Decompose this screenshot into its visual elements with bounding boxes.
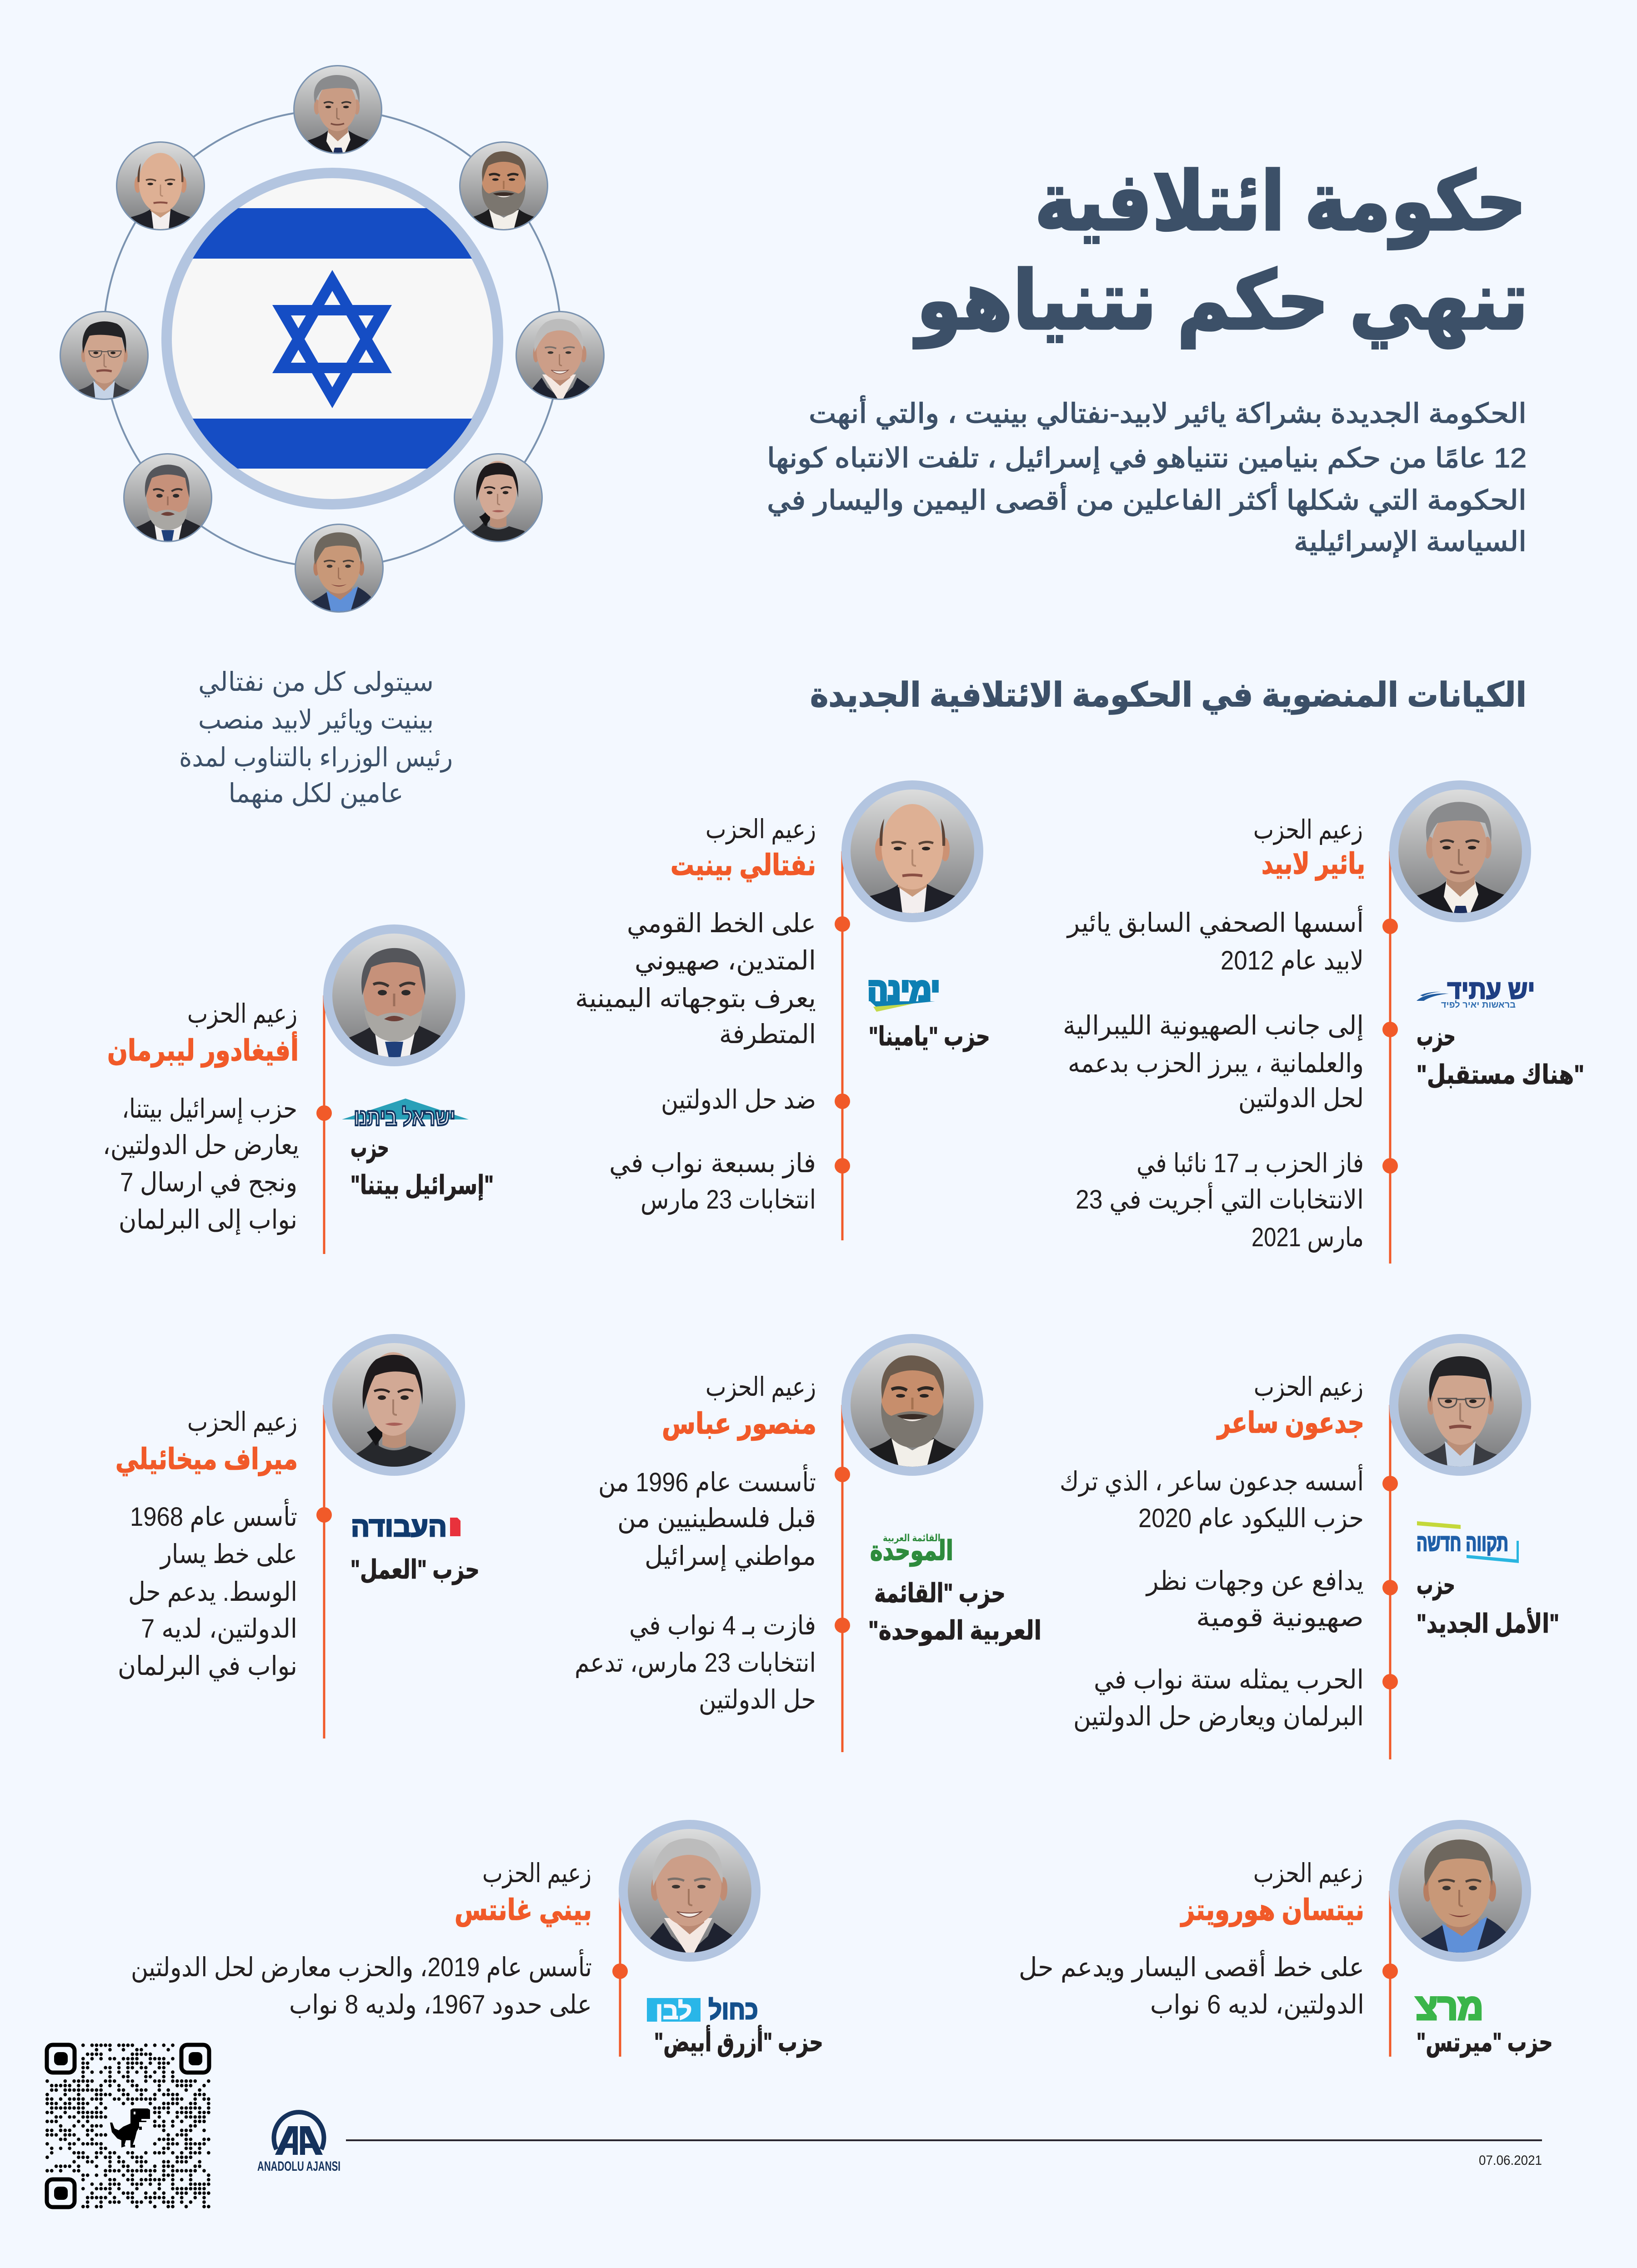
rotation note: عامين لكل منهما: [228, 779, 404, 809]
logo: Yisrael Beiteinu: [342, 1099, 469, 1131]
QR modules: [47, 2045, 209, 2207]
logo: Anadolu Agency: [257, 2112, 340, 2174]
logo: Meretz: מרצ: [1416, 1987, 1483, 2027]
title: حكومة ائتلافية: [1035, 156, 1527, 250]
title: تنهي حكم نتنياهو: [913, 255, 1528, 349]
portrait: Abbas: [841, 1334, 983, 1476]
intro text: الحكومة التي شكلها أكثر الفاعلين من أقصى اليمين واليسار في: [767, 482, 1527, 516]
leader: زعيم الحزب: [1253, 815, 1363, 845]
party facts: [131, 1949, 592, 2020]
party facts: ضد حل الدولتين: [661, 1085, 816, 1115]
party name: "إسرائيل بيتنا": [350, 1170, 494, 1201]
timeline dot: [1382, 1963, 1398, 1979]
leader: يائير لابيد: [1262, 847, 1365, 881]
QR code: [47, 2045, 209, 2207]
party facts: الدولتين، لديه 7: [141, 1614, 297, 1644]
party facts: الحرب يمثله ستة نواب في: [1094, 1665, 1364, 1695]
leader: زعيم الحزب: [706, 814, 816, 845]
party name: [868, 1579, 1041, 1646]
portrait: Lapid: [1389, 780, 1531, 922]
leader: ميراف ميخائيلي: [115, 1443, 298, 1476]
party name: [1417, 1570, 1559, 1639]
party facts: لابيد عام 2012: [1221, 946, 1364, 976]
party name: حزب "ميرتس": [1417, 2028, 1553, 2058]
party facts: حزب إسرائيل بيتنا،: [122, 1094, 297, 1124]
icon: dinosaur: [110, 2108, 150, 2148]
party facts: المتطرفة: [719, 1019, 816, 1050]
QR finder patterns: [47, 2045, 209, 2207]
portrait: Lieberman: [323, 924, 465, 1066]
party facts: الدولتين، لديه 6 نواب: [1150, 1990, 1364, 2020]
portrait ring: Gantz: [516, 311, 605, 400]
logo: United Arab List: الموحدة: [870, 1535, 953, 1567]
party facts: تأسس عام 1968: [130, 1499, 297, 1532]
logo: United Arab List: القائمة العربية: [883, 1532, 941, 1544]
party name: حزب: [350, 1133, 389, 1164]
rotation note: رئيس الوزراء بالتناوب لمدة: [179, 743, 453, 773]
timeline dots: [1382, 919, 1398, 1174]
party facts: على الخط القومي: [627, 909, 816, 939]
flag of Israel: [161, 168, 503, 510]
party name: حزب "القائمة: [874, 1579, 1006, 1609]
party facts: على حدود 1967، ولديه 8 نواب: [289, 1990, 592, 2020]
party facts: [1019, 1950, 1364, 2020]
portrait ring: Bennett: [116, 141, 205, 230]
party facts: يعارض حل الدولتين،: [103, 1130, 299, 1161]
leader: منصور عباس: [662, 1407, 816, 1441]
logo: Yesh Atid: יש עתיד: [1447, 975, 1535, 1004]
party facts: صهيونية قومية: [1196, 1603, 1364, 1633]
title: [913, 156, 1528, 349]
leader: زعيم الحزب: [1253, 1858, 1363, 1889]
portrait ring: Lieberman: [123, 453, 212, 542]
date: 07.06.2021: [1479, 2153, 1542, 2168]
leader: جدعون ساعر: [1216, 1406, 1364, 1440]
portrait ring: Lapid: [293, 65, 382, 154]
party facts: أسسها الصحفي السابق يائير: [1066, 905, 1364, 939]
party facts: ونجح في ارسال 7: [120, 1168, 297, 1198]
rotation note: بينيت ويائير لابيد منصب: [198, 705, 434, 735]
party facts: فاز الحزب بـ 17 نائبا في: [1136, 1149, 1364, 1179]
timeline dots: [835, 1467, 850, 1633]
portrait ring: Michaeli: [454, 453, 543, 542]
panel: United Arab List / Abbas: [575, 1334, 1041, 1752]
logo: New Hope: [1417, 1521, 1519, 1563]
party facts: والعلمانية ، يبرز الحزب بدعمه: [1068, 1049, 1364, 1079]
portrait: Horowitz: [1389, 1820, 1531, 1962]
party facts: مواطني إسرائيل: [645, 1541, 816, 1572]
panel: Labor / Michaeli: [115, 1334, 480, 1738]
intro text: السياسة الإسرائيلية: [1294, 526, 1527, 558]
timeline dot: [316, 1105, 332, 1121]
party facts: قبل فلسطينيين من: [617, 1504, 816, 1534]
leader: زعيم الحزب: [187, 999, 297, 1029]
panel: Yisrael Beiteinu / Lieberman: [103, 924, 494, 1254]
leader: زعيم الحزب: [187, 1407, 297, 1438]
panel: New Hope / Saar: [1060, 1334, 1559, 1759]
portrait: Michaeli: [323, 1334, 465, 1476]
panel: Meretz / Horowitz: [1019, 1820, 1553, 2058]
portrait: Saar: [1389, 1334, 1531, 1476]
party facts: تأسس عام 2019، والحزب معارض لحل الدولتين: [131, 1949, 592, 1983]
party facts: [575, 1464, 816, 1715]
party name: "هناك مستقبل": [1417, 1060, 1584, 1089]
leader: نيتسان هورويتز: [1180, 1893, 1364, 1927]
leader: نفتالي بينيت: [671, 849, 816, 882]
party name: حزب: [1417, 1022, 1456, 1052]
rotation note: [179, 667, 453, 809]
logo: Yesh Atid: בראשות יאיר לפיד: [1441, 1000, 1516, 1010]
party facts: الانتخابات التي أجريت في 23: [1076, 1182, 1364, 1215]
party facts: [1060, 1464, 1364, 1732]
panel: Yamina / Bennett: [575, 780, 990, 1240]
party facts: إلى جانب الصهيونية الليبرالية: [1063, 1011, 1364, 1041]
party facts: على خط أقصى اليسار ويدعم حل: [1019, 1950, 1364, 1983]
intro text: الحكومة الجديدة بشراكة يائير لابيد-نفتالي بينيت ، والتي أنهت: [809, 395, 1527, 430]
leader: زعيم الحزب: [482, 1858, 591, 1889]
party name: [1417, 1022, 1584, 1089]
party name: حزب "أزرق أبيض": [654, 2025, 823, 2058]
party facts: [103, 1094, 299, 1235]
panel: Blue and White / Gantz: [131, 1820, 823, 2058]
logo: Yesh Atid: [1417, 975, 1535, 1010]
portrait: Bennett: [841, 780, 983, 922]
party facts: فازت بـ 4 نواب في: [629, 1611, 816, 1641]
logo: Yisrael Beiteinu: ישראל ביתנו: [354, 1104, 456, 1131]
leader: [1180, 1858, 1364, 1927]
logo: Blue and White: לבן: [656, 1998, 692, 2024]
party facts: حزب الليكود عام 2020: [1138, 1504, 1364, 1534]
party facts: يدافع عن وجهات نظر: [1145, 1566, 1364, 1597]
party name: العربية الموحدة": [868, 1616, 1041, 1646]
leader: [1253, 815, 1365, 881]
party facts: البرلمان ويعارض حل الدولتين: [1073, 1702, 1364, 1732]
leader: [107, 999, 299, 1068]
party facts: أسسه جدعون ساعر ، الذي ترك: [1060, 1464, 1364, 1497]
party facts: تأسست عام 1996 من: [598, 1464, 816, 1498]
leader: [1216, 1372, 1364, 1440]
party facts: [118, 1499, 297, 1682]
party name: حزب: [1417, 1570, 1455, 1601]
leader: [662, 1372, 816, 1441]
leader: [455, 1858, 592, 1927]
logo: Blue and White: [647, 1995, 758, 2025]
party facts: نواب في البرلمان: [118, 1651, 297, 1682]
timeline dots: [1382, 1476, 1398, 1689]
logo: New Hope: תקווה חדשה: [1417, 1530, 1508, 1556]
party facts: [575, 909, 816, 1215]
party facts: انتخابات 23 مارس: [641, 1185, 816, 1215]
party facts: انتخابات 23 مارس، تدعم: [575, 1648, 816, 1678]
intro text: 12 عامًا من حكم بنيامين نتنياهو في إسرائيل ، تلفت الانتباه كونها: [767, 443, 1527, 474]
party name: "الأمل الجديد": [1417, 1608, 1559, 1639]
logo: Anadolu Agency: ANADOLU AJANSI: [257, 2159, 340, 2174]
intro text: [767, 395, 1527, 558]
leader: [115, 1407, 298, 1476]
party name: حزب "العمل": [350, 1555, 480, 1585]
leader: بيني غانتس: [455, 1893, 592, 1927]
panel: Yesh Atid / Lapid: [1063, 780, 1584, 1264]
logo: Labor: העבודה: [351, 1512, 447, 1542]
party facts: على خط يسار: [159, 1539, 297, 1569]
leader: زعيم الحزب: [1254, 1372, 1363, 1403]
timeline dot: [612, 1963, 628, 1979]
coalition ring diagram: [60, 65, 605, 613]
leader: أفيغادور ليبرمان: [107, 1031, 299, 1068]
logo: Blue and White: כחול: [708, 1995, 758, 2025]
party facts: الوسط. يدعم حل: [128, 1577, 297, 1608]
timeline dots: [835, 916, 850, 1174]
logo: Yamina: ימינה: [867, 972, 940, 1007]
party facts: مارس 2021: [1252, 1223, 1364, 1253]
section heading: الكيانات المنضوية في الحكومة الائتلافية الجديدة: [810, 676, 1527, 715]
party facts: [1063, 905, 1364, 1253]
party facts: حل الدولتين: [699, 1685, 816, 1715]
portrait ring: Saar: [60, 311, 149, 400]
portrait: Gantz: [619, 1820, 761, 1962]
rotation note: سيتولى كل من نفتالي: [198, 667, 434, 698]
party facts: نواب إلى البرلمان: [119, 1205, 297, 1235]
timeline dot: [316, 1507, 332, 1523]
leader: [671, 814, 816, 882]
party facts: لحل الدولتين: [1238, 1084, 1364, 1114]
portrait ring: Horowitz: [295, 524, 384, 613]
portrait ring: Abbas: [459, 141, 548, 230]
party facts: يعرف بتوجهاته اليمينية: [575, 984, 816, 1014]
party name: [350, 1133, 494, 1201]
leader: زعيم الحزب: [706, 1372, 816, 1403]
party facts: فاز بسبعة نواب في: [609, 1149, 816, 1179]
party facts: المتدين، صهيوني: [635, 946, 816, 976]
party name: حزب "يامينا": [869, 1022, 990, 1052]
